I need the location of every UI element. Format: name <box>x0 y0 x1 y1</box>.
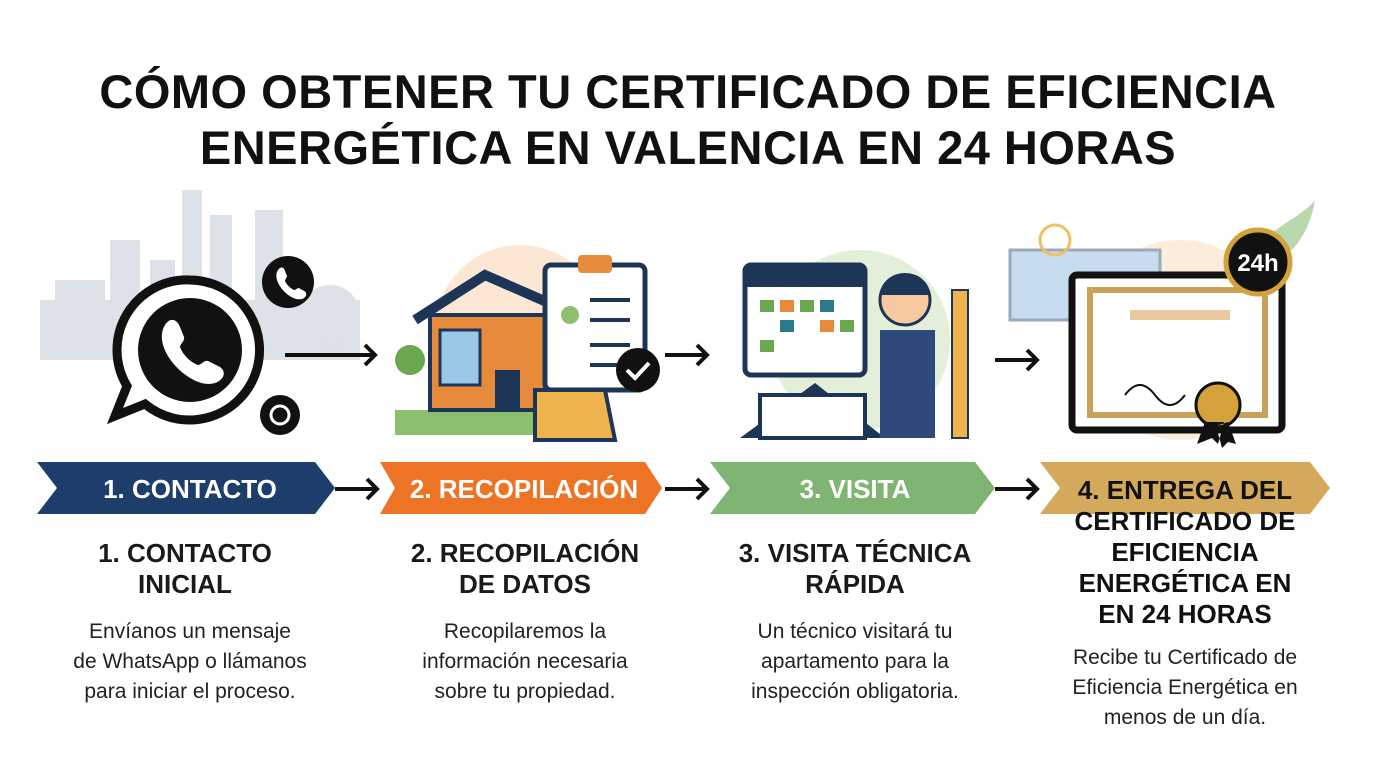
step 4 text: Eficiencia Energética en <box>1072 676 1298 699</box>
step 4 text <box>1072 646 1298 729</box>
step 4 text: menos de un día. <box>1104 706 1266 729</box>
banner 2 <box>380 462 662 514</box>
step 3 heading <box>739 538 971 599</box>
icon: certificate 24h <box>1010 200 1315 448</box>
banner 3: 3. VISITA <box>800 474 911 504</box>
banner 1: 1. CONTACTO <box>103 474 277 504</box>
step 2 heading: 2. RECOPILACIÓN <box>411 538 639 568</box>
arrow 2 <box>665 345 707 365</box>
step 3 heading: 3. VISITA TÉCNICA <box>739 538 971 568</box>
icon: calendar and technician <box>740 250 968 438</box>
title: ENERGÉTICA EN VALENCIA EN 24 HORAS <box>200 121 1176 174</box>
step 3 text: apartamento para la <box>761 650 949 673</box>
banner 3 <box>710 462 995 514</box>
step 4 heading: EFICIENCIA <box>1111 537 1259 567</box>
step 2 text: información necesaria <box>422 650 628 673</box>
step 2 heading: DE DATOS <box>459 569 591 599</box>
step 1 heading <box>98 538 272 599</box>
step 4 heading: CERTIFICADO DE <box>1074 506 1296 536</box>
step 3 text <box>751 620 959 703</box>
step 4 heading: EN 24 HORAS <box>1098 599 1272 629</box>
banner 2: 2. RECOPILACIÓN <box>410 474 638 504</box>
step 4 heading <box>1074 475 1296 629</box>
arrow 3 <box>995 350 1037 370</box>
step 3 heading: RÁPIDA <box>805 569 905 599</box>
step 2 text: sobre tu propiedad. <box>435 680 615 703</box>
arrow 1 <box>285 345 375 365</box>
banner 1 <box>37 462 335 514</box>
banner arrows <box>335 479 1037 499</box>
step 4 heading: ENERGÉTICA EN <box>1079 568 1291 598</box>
step 1 heading: INICIAL <box>138 569 232 599</box>
step 1 text: de WhatsApp o llámanos <box>73 650 307 673</box>
step 3 text: Un técnico visitará tu <box>758 620 952 643</box>
title: CÓMO OBTENER TU CERTIFICADO DE EFICIENCIA <box>99 65 1277 118</box>
icon: whatsapp with city skyline <box>40 190 360 435</box>
step 2 text: Recopilaremos la <box>444 620 606 643</box>
step 2 text <box>422 620 628 703</box>
banner 4 <box>1040 462 1330 514</box>
step 1 text: Envíanos un mensaje <box>89 620 291 643</box>
step 1 heading: 1. CONTACTO <box>98 538 272 568</box>
step 2 heading <box>411 538 639 599</box>
step 4 text: Recibe tu Certificado de <box>1073 646 1297 669</box>
icon: certificate 24h: 24h <box>1237 250 1279 277</box>
title <box>99 65 1277 174</box>
icon: house with clipboard <box>395 245 660 440</box>
step 4 heading: 4. ENTREGA DEL <box>1078 475 1292 505</box>
step 1 text: para iniciar el proceso. <box>84 680 296 703</box>
step 1 text <box>73 620 307 703</box>
step 3 text: inspección obligatoria. <box>751 680 959 703</box>
